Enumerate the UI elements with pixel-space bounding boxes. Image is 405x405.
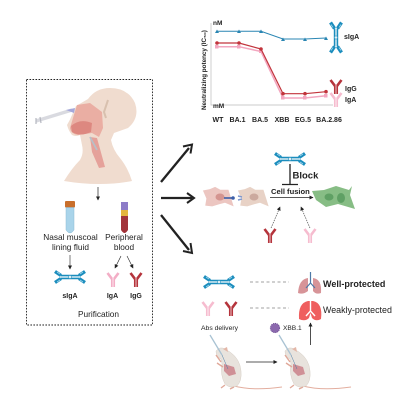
arrow: fluid to sIgA: [69, 255, 71, 269]
label: well-protected: Well-protected: [323, 279, 385, 289]
icon: spike cell: [203, 187, 235, 206]
icon: nasal fluid tube: [65, 201, 75, 233]
icon: IgA: [304, 229, 316, 243]
icon: IgG: [226, 302, 236, 316]
icon: IgA: [108, 273, 118, 287]
icon: IgG: [130, 273, 142, 287]
icon: IgA: [330, 93, 342, 107]
label: nasal fluid: lining fluid: [52, 242, 89, 252]
label: purification: Purification: [78, 309, 119, 319]
arrow: fusion: [270, 196, 313, 198]
dashed arrow: IgA: [301, 207, 310, 228]
axis: [211, 23, 333, 105]
panel: purification workflow: [26, 80, 152, 325]
label: peripheral blood: Peripheral: [105, 232, 143, 242]
icon: sIgA vertical: [330, 22, 342, 52]
dashed arrow: IgG: [271, 207, 280, 228]
series labels: IgA: [345, 97, 356, 104]
icon: mouse 1: [210, 335, 282, 389]
panel: neutralizing potency chart: [201, 20, 359, 124]
arrow: [97, 187, 99, 200]
label: weakly-protected: Weakly-protected: [323, 305, 392, 315]
series: IgG: [215, 41, 328, 95]
x labels: XBB: [275, 117, 289, 124]
icon: sIgA: [275, 154, 305, 164]
icon: head with nasal spray: [36, 88, 136, 184]
axis ends: mM: [213, 103, 224, 110]
x labels: WT: [213, 117, 224, 124]
icon: sIgA: [55, 272, 85, 282]
block symbol: [282, 164, 298, 184]
arrow: mouse to mouse: [246, 361, 277, 363]
icon: mouse 2: [279, 335, 351, 389]
icon: receptor cell: [238, 187, 269, 206]
label: peripheral blood: blood: [114, 242, 135, 252]
icon: sIgA: [204, 276, 234, 288]
arrow: blood to IgA: [115, 256, 121, 268]
label: XBB.1: XBB.1: [283, 325, 302, 332]
labels: antibodies: IgA: [107, 293, 118, 300]
panel: mouse protection: [201, 272, 392, 389]
icon: fused cell: [312, 186, 355, 209]
series: sIgA: [215, 30, 328, 41]
icon: IgG: [330, 80, 342, 94]
series labels: sIgA: [344, 34, 359, 41]
label: Block: Block: [292, 170, 319, 182]
dashed box: [26, 80, 152, 325]
series: IgA: [215, 45, 328, 100]
label: nasal fluid: Nasal muscoal: [43, 232, 98, 242]
icon: IgA: [202, 302, 214, 316]
icon: blood tube: [121, 202, 128, 233]
x labels: BA.2.86: [316, 117, 342, 124]
arrow: blood to IgG: [127, 256, 133, 268]
labels: antibodies: sIgA: [62, 293, 78, 300]
arrow: infection to lungs: [310, 323, 312, 345]
x labels: BA.5: [252, 117, 268, 124]
x labels: EG.5: [295, 117, 311, 124]
icon: infected lung: [299, 298, 321, 320]
labels: antibodies: IgG: [130, 293, 142, 300]
label: cell fusion: Cell fusion: [271, 187, 310, 196]
panel: cell fusion block: [203, 154, 355, 243]
series labels: IgG: [345, 86, 357, 93]
icon: IgG: [264, 229, 276, 243]
axis ends: nM: [213, 20, 222, 27]
axis title: Neutralizing potency (IC₅₀): [201, 30, 208, 110]
arrows: to three panels: [161, 144, 194, 253]
label: Abs delivery: Abs delivery: [201, 325, 239, 332]
icon: healthy lung: [298, 272, 321, 294]
x labels: BA.1: [230, 117, 246, 124]
dashed lines: [250, 282, 289, 308]
icon: XBB.1 virus: [270, 323, 280, 333]
